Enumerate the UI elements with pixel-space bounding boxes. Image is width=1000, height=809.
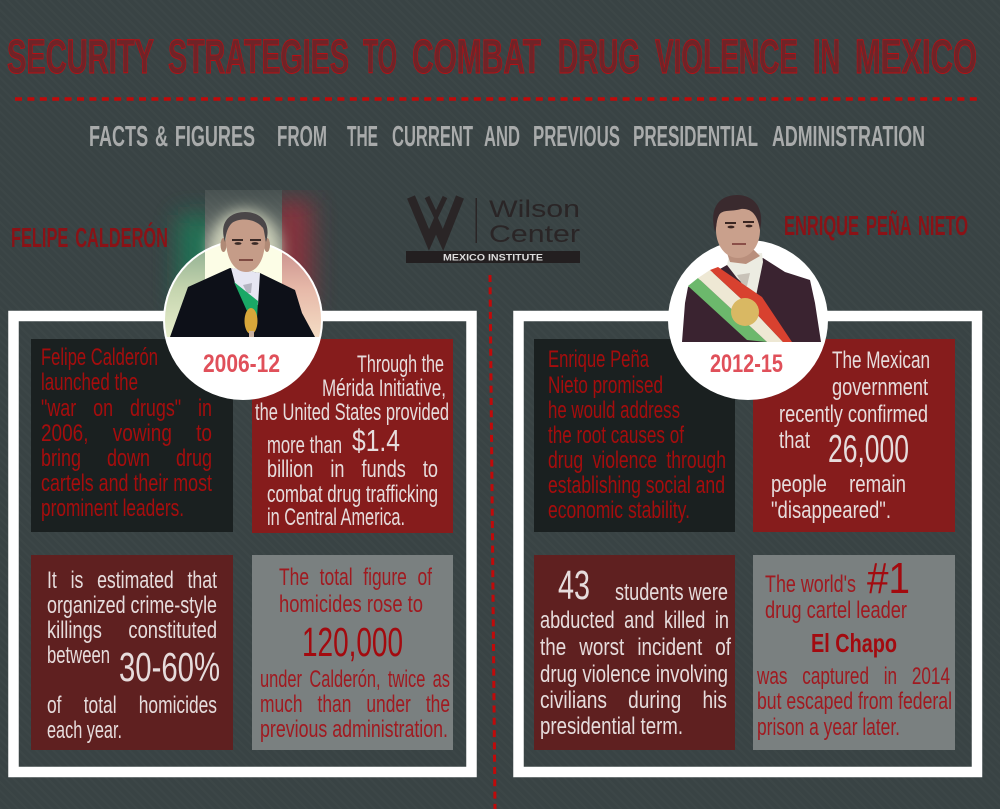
card: organized crime killings: It is estimated that — [47, 567, 217, 594]
card: disappeared: government — [832, 374, 928, 401]
card: El Chapo: El Chapo — [811, 628, 897, 658]
card: Calderón war on drugs: bring down drug — [41, 445, 212, 472]
panel: Calderón frame — [14, 316, 472, 772]
card: total homicides: The total figure of — [279, 564, 432, 591]
card: El Chapo — [753, 554, 955, 750]
card: Peña Nieto promise: economic stability. — [548, 497, 690, 524]
card: Mérida Initiative — [252, 339, 453, 533]
year label: 2006-12: 2006-12 — [203, 350, 280, 378]
card: 43 students: drug violence involving — [540, 661, 728, 688]
card: organized crime killings — [31, 555, 233, 750]
card: Mérida Initiative: more than — [267, 432, 342, 459]
card: disappeared: recently confirmed — [779, 401, 928, 428]
title: VIOLENCE — [655, 31, 798, 84]
card: Peña Nieto promise: drug violence through — [548, 447, 726, 474]
card: 43 students: civilians during his — [540, 687, 727, 714]
card: disappeared: people remain — [771, 471, 906, 498]
card: Mérida Initiative: the United States provided — [255, 399, 449, 426]
card: Mérida Initiative: Through the — [357, 351, 444, 378]
logo wordmark: Center — [489, 221, 580, 248]
subtitle: PRESIDENTIAL — [633, 121, 758, 153]
card: total homicides: much than under the — [260, 691, 450, 718]
card: Calderón war on drugs: cartels and their most — [41, 470, 212, 497]
card: organized crime killings: organized crime-style — [47, 592, 217, 619]
card: total homicides — [252, 555, 453, 750]
card: Peña Nieto promise: establishing social and — [548, 472, 725, 499]
portrait badge: Peña Nieto — [668, 195, 828, 400]
subtitle: CURRENT — [392, 121, 473, 153]
card: Mérida Initiative: combat drug trafficking — [267, 481, 438, 508]
card: Calderón war on drugs: 2006, vowing to — [41, 420, 212, 447]
logo wordmark — [489, 196, 580, 248]
card: Mérida Initiative: in Central America. — [267, 504, 405, 531]
subtitle: FROM — [277, 121, 327, 153]
card: El Chapo: prison a year later. — [757, 714, 900, 741]
card: Mérida Initiative: Mérida Initiative, — [322, 375, 446, 402]
card: organized crime killings: each year. — [47, 717, 122, 744]
card: organized crime killings: between — [47, 642, 110, 669]
card: Calderón war on drugs: launched the — [41, 369, 138, 396]
name: Felipe Calderón: FELIPE CALDERÓN — [11, 222, 168, 253]
portrait: Peña Nieto — [682, 195, 821, 342]
card: Calderón war on drugs: prominent leaders. — [41, 495, 184, 522]
card: Mérida Initiative: $1.4 — [352, 423, 400, 458]
title: SECURITY — [7, 31, 154, 84]
card: El Chapo: #1 — [867, 554, 910, 603]
card: 43 students: the worst incident of — [540, 634, 731, 661]
card: Calderón war on drugs — [31, 339, 233, 532]
card: 43 students: abducted and killed in — [540, 607, 729, 634]
card: Peña Nieto promise: the root causes of — [548, 422, 684, 449]
card: 43 students: students were — [615, 579, 728, 606]
card: 43 students — [534, 555, 735, 750]
title: IN — [813, 31, 840, 84]
title — [7, 31, 977, 84]
subtitle — [89, 121, 925, 153]
card: 43 students: 43 — [558, 562, 590, 608]
card: disappeared: that — [779, 427, 810, 454]
card: disappeared: The Mexican — [832, 347, 930, 374]
card: disappeared — [753, 339, 955, 532]
card: disappeared: "disappeared". — [771, 497, 891, 524]
card: Calderón war on drugs: Felipe Calderón — [41, 344, 158, 371]
card: El Chapo: The world's — [765, 571, 856, 598]
logo wordmark: Wilson — [489, 196, 580, 223]
card: Calderón war on drugs: "war on drugs" in — [41, 395, 212, 422]
portrait: Calderón — [170, 212, 315, 337]
card: total homicides: under Calderón, twice as — [260, 666, 450, 693]
logo: Wilson Center Mexico Institute: MEXICO INSTITUTE — [443, 252, 543, 262]
icon: W mark — [411, 197, 460, 240]
card: disappeared: 26,000 — [828, 428, 909, 471]
card: 43 students: presidential term. — [540, 713, 683, 740]
subtitle: PREVIOUS — [533, 121, 620, 153]
card: Peña Nieto promise: he would address — [548, 397, 680, 424]
card: total homicides: homicides rose to — [279, 591, 423, 618]
card: Mérida Initiative: billion in funds to — [267, 456, 438, 483]
panel: Peña Nieto frame — [518, 316, 977, 772]
card: Peña Nieto promise: Enrique Peña — [548, 346, 649, 373]
title: STRATEGIES — [168, 31, 349, 84]
card: total homicides: previous administration. — [260, 716, 448, 743]
flag glow behind Calderón — [178, 190, 312, 320]
title: TO — [363, 31, 397, 84]
card: organized crime killings: 30-60% — [119, 644, 220, 690]
card: Peña Nieto promise — [534, 339, 735, 532]
subtitle: THE — [347, 121, 378, 153]
subtitle: AND — [484, 121, 520, 153]
year label: 2012-15: 2012-15 — [710, 350, 783, 378]
title: COMBAT — [412, 31, 541, 84]
card: organized crime killings: killings constituted — [47, 617, 217, 644]
portrait badge: Calderón — [160, 212, 327, 400]
card: Peña Nieto promise: Nieto promised — [548, 372, 663, 399]
card: El Chapo: drug cartel leader — [765, 597, 907, 624]
card: organized crime killings: of total homicides — [47, 692, 217, 719]
subtitle: FACTS & FIGURES — [89, 121, 255, 153]
logo: Wilson Center Mexico Institute — [406, 196, 580, 263]
title: DRUG — [558, 31, 640, 84]
card: total homicides: 120,000 — [302, 619, 403, 665]
